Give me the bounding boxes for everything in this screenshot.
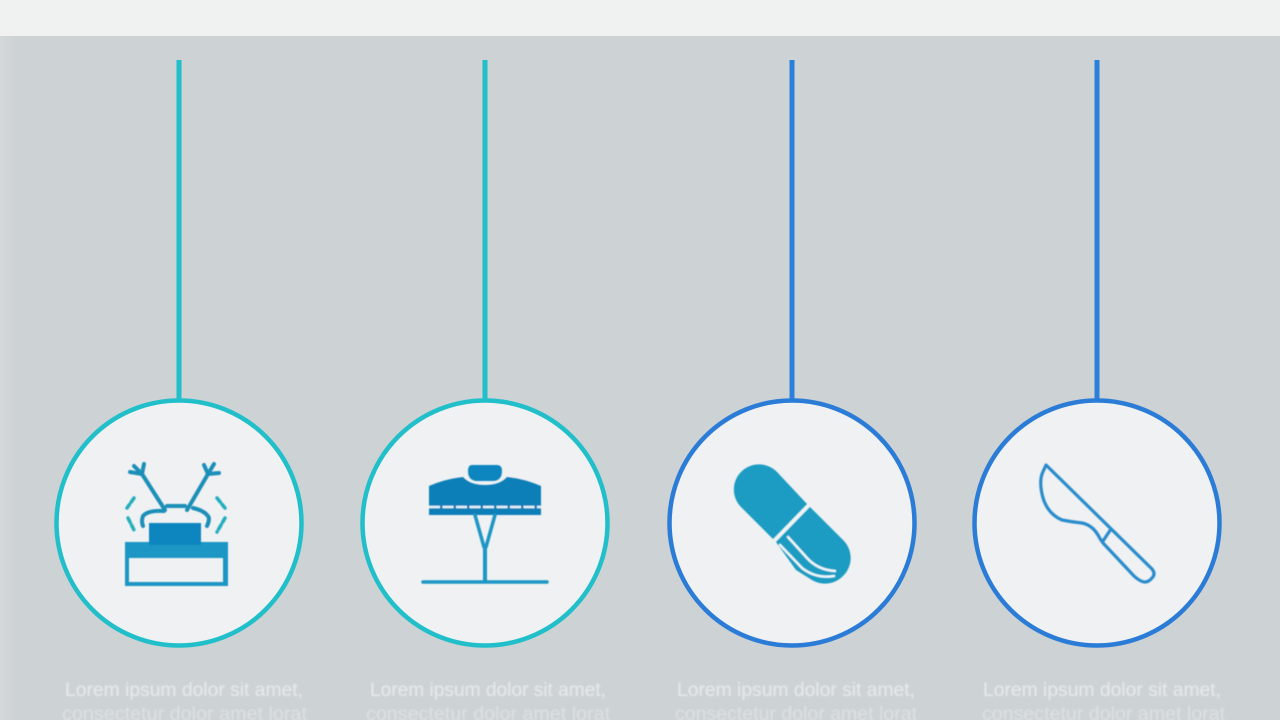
captions (62, 680, 1226, 720)
connector line 1 (176, 60, 182, 402)
circle 2 (362, 400, 608, 646)
connector line 3 (790, 60, 794, 402)
caption 2 line 1: Lorem ipsum dolor sit amet, (370, 680, 606, 701)
column 4: scalpel (974, 60, 1220, 646)
connector line 4 (1094, 60, 1100, 402)
circle 1 (56, 400, 302, 646)
icon: scalpel (1041, 465, 1154, 582)
connector line 2 (482, 60, 488, 402)
icon: machine with arms (125, 464, 228, 586)
top band (0, 0, 1280, 36)
icon: stamp tool (423, 465, 547, 582)
column 1: equipment (56, 60, 302, 646)
caption 1 line 1: Lorem ipsum dolor sit amet, (65, 680, 303, 701)
column 3: capsule (670, 60, 914, 646)
circle 3 (670, 400, 914, 646)
circle 4 (974, 400, 1220, 646)
caption 4 line 1: Lorem ipsum dolor sit amet, (983, 680, 1221, 701)
caption 3 line 1: Lorem ipsum dolor sit amet, (677, 680, 915, 701)
icon: capsule (734, 464, 851, 584)
column 2: stamp tool (362, 60, 608, 646)
